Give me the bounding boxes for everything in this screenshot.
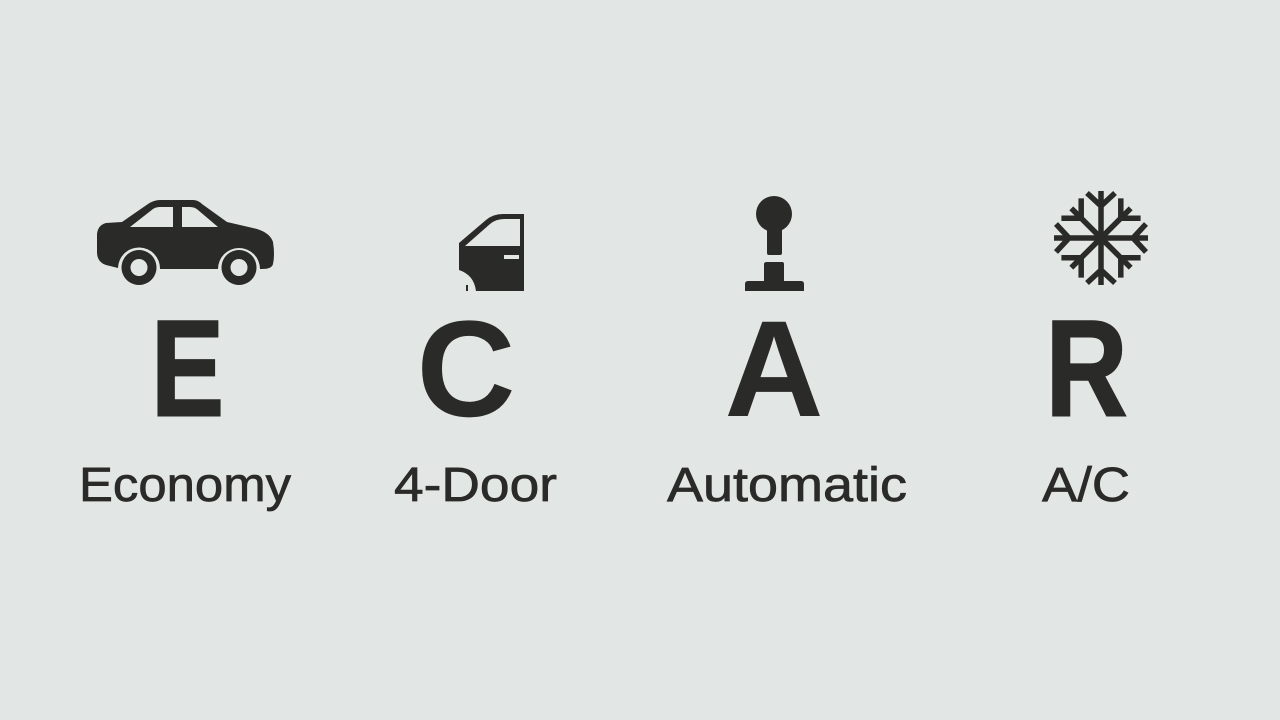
column: 4-Door — [394, 214, 557, 512]
icon: car door — [459, 214, 524, 291]
letter E: E — [151, 293, 224, 445]
letter C: C — [417, 293, 515, 446]
column: Economy — [79, 200, 291, 512]
column: A/C — [1042, 191, 1148, 512]
icon: gear shifter — [745, 196, 804, 291]
label: 4-Door: 4-Door — [394, 459, 557, 512]
letter R: R — [1045, 291, 1128, 445]
icon: snowflake — [1054, 191, 1148, 285]
label: Automatic: Automatic — [667, 459, 907, 512]
column: Automatic — [667, 196, 907, 512]
label: A/C: A/C — [1042, 459, 1130, 512]
letter A: A — [725, 293, 823, 446]
icon: car — [97, 200, 274, 285]
label: Economy: Economy — [79, 459, 291, 512]
